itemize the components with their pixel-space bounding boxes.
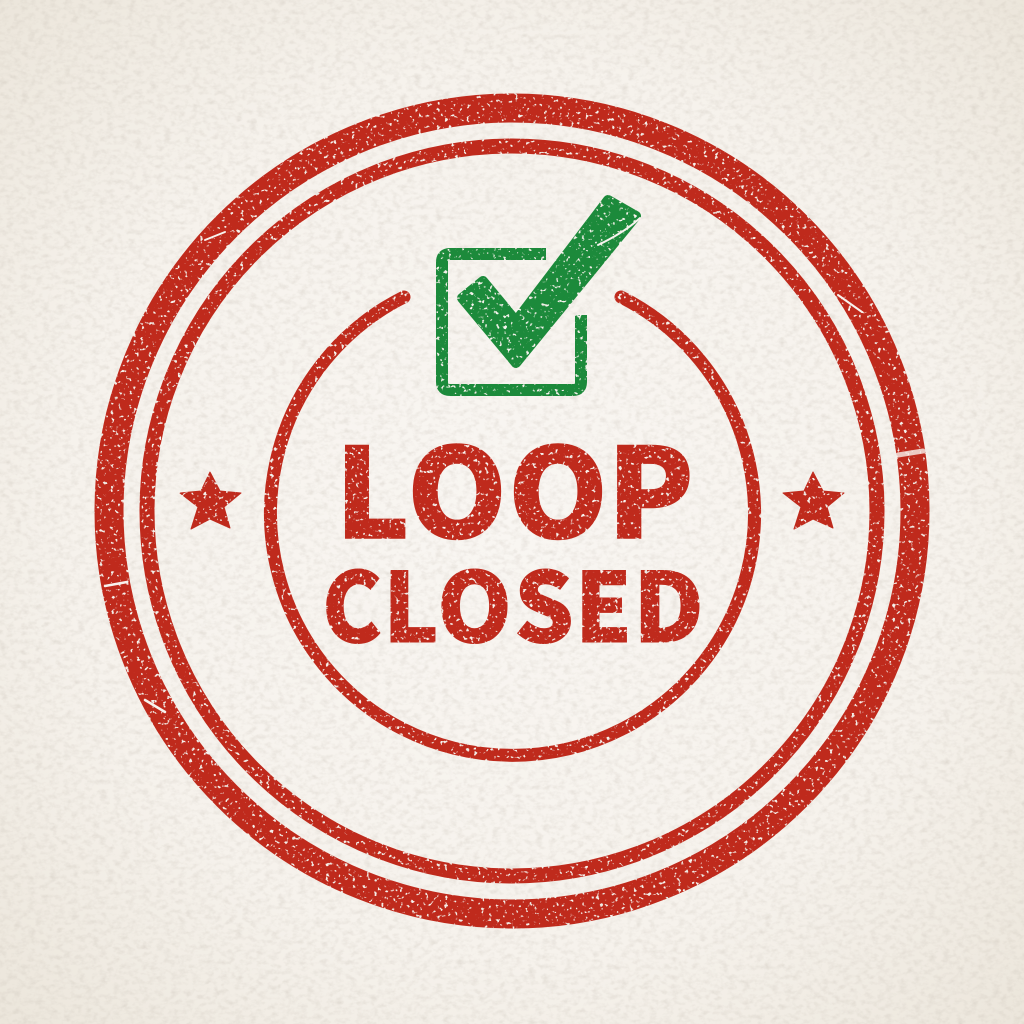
inner ring bbox=[147, 146, 877, 876]
outer ring bbox=[109, 108, 915, 914]
title: CLOSED: L bbox=[383, 531, 439, 670]
check mark bbox=[462, 200, 636, 363]
icon: green checkbox with check mark bbox=[442, 200, 636, 390]
title: CLOSED: S bbox=[514, 531, 574, 670]
title: CLOSED: O bbox=[437, 531, 512, 670]
right star bbox=[783, 472, 844, 529]
stamp wear cracks bbox=[105, 218, 923, 712]
title: LOOP: O bbox=[407, 394, 507, 574]
title: CLOSED: E bbox=[575, 531, 632, 670]
title: CLOSED: D bbox=[633, 531, 704, 670]
open circle bbox=[270, 297, 754, 755]
checkbox outline bbox=[442, 254, 581, 390]
title: CLOSED bbox=[322, 531, 704, 670]
red stamp bbox=[109, 108, 915, 914]
title: LOOP bbox=[335, 394, 694, 574]
left star bbox=[180, 472, 241, 529]
title: CLOSED: C bbox=[322, 531, 382, 670]
title: LOOP: O bbox=[508, 394, 608, 574]
title: LOOP: L bbox=[335, 394, 410, 574]
title: LOOP: P bbox=[607, 394, 694, 574]
